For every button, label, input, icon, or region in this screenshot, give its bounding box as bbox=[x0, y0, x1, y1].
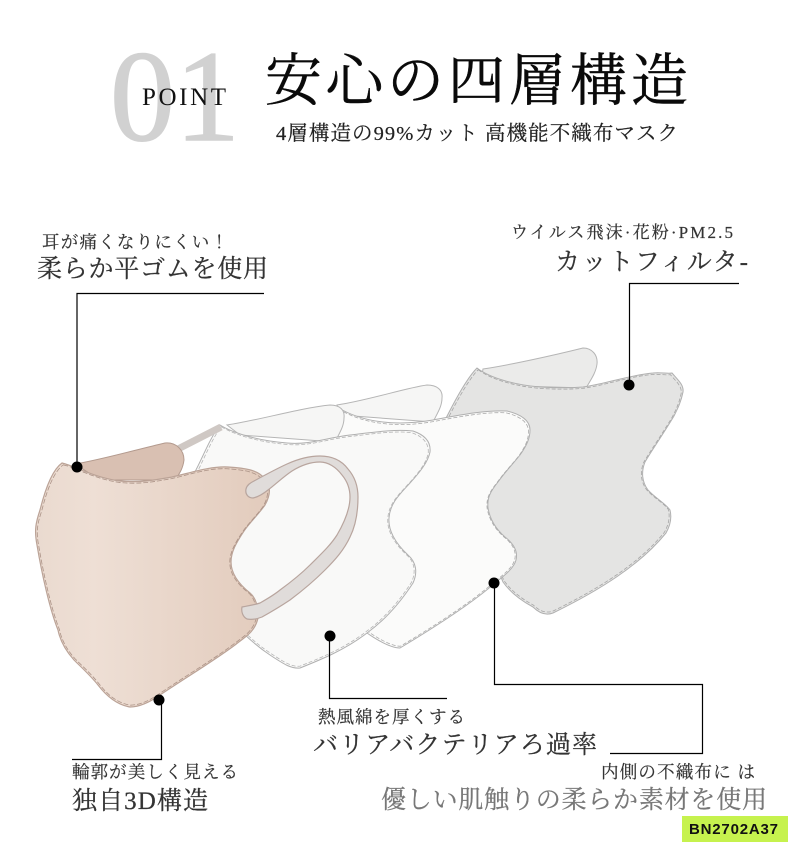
ear loop bbox=[242, 456, 358, 619]
melt-blown heading: バリアバクテリアろ過率 bbox=[313, 731, 597, 759]
3D caption: 輪郭が美しく見える bbox=[72, 762, 238, 782]
layer 1: pink mask inner bbox=[75, 443, 184, 480]
inner fabric heading: 優しい肌触りの柔らか素材を使用 bbox=[381, 786, 767, 814]
ear strap caption: 耳が痛くなりにくい！ bbox=[42, 232, 228, 252]
big number 01: 01 bbox=[110, 25, 240, 169]
layer 4: grey filter bbox=[440, 348, 683, 614]
title block bbox=[110, 25, 688, 169]
callout: 3D outline bbox=[72, 694, 238, 815]
product code badge: BN2702A37 bbox=[689, 821, 778, 838]
layer 2: melt-blown bbox=[190, 405, 430, 668]
callout: cut filter bbox=[511, 223, 748, 390]
layer 1: pink mask front bbox=[36, 463, 269, 707]
filter heading: カットフィルタ- bbox=[555, 249, 748, 276]
callout: ear strap bbox=[37, 232, 268, 472]
filter caption: ウイルス飛沫·花粉·PM2.5 bbox=[511, 223, 733, 242]
back ear strap bbox=[178, 427, 221, 449]
callout: inner fabric bbox=[381, 578, 767, 814]
main heading: 安心の四層構造 bbox=[265, 50, 688, 113]
subtitle: 4層構造の99%カット 高機能不織布マスク bbox=[276, 122, 678, 145]
ear strap heading: 柔らか平ゴムを使用 bbox=[37, 255, 268, 283]
POINT label: POINT bbox=[142, 84, 226, 111]
layer 3: white non-woven bbox=[330, 385, 530, 648]
melt-blown caption: 熱風綿を厚くする bbox=[318, 707, 465, 727]
mask illustration bbox=[36, 348, 683, 707]
product code badge bbox=[682, 816, 788, 842]
callout: melt-blown layer bbox=[313, 630, 597, 759]
3D heading: 独自3D構造 bbox=[72, 787, 208, 815]
inner fabric caption: 内側の不織布に は bbox=[601, 762, 755, 782]
